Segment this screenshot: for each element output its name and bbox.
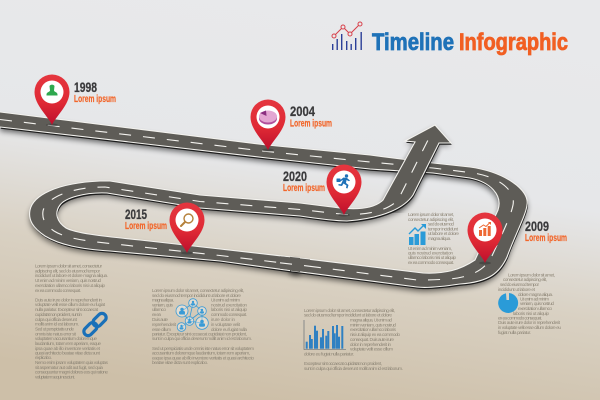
icon: person — [46, 85, 58, 96]
text block: far left: incididunt ut labore et dolore magna aliqua. — [35, 273, 108, 278]
label: 2020: 2020 — [283, 168, 307, 184]
text block: center left: ex ea — [152, 312, 161, 317]
text block: center: sunt in culpa qui officia deserunt mollit anim id est laborum. — [304, 366, 403, 371]
text block: far left: ipsa quae ab illo inventore veritatis et — [35, 346, 101, 351]
label: 1998: Lorem ipsum — [74, 94, 116, 105]
road shadow: lower loop — [30, 146, 439, 276]
text block: growth chart note — [408, 212, 459, 265]
label: 2004: 2004 — [290, 103, 315, 119]
text block: far left: voluptate velit esse cillum dolore eu fugiat — [35, 302, 106, 307]
icon: pie chart — [498, 293, 518, 313]
label: 2015: 2015 — [125, 206, 147, 222]
text block: far left: exercitation ullamco laboris nisi ut aliquip — [35, 283, 105, 288]
label: 2004 — [290, 103, 332, 130]
road — [0, 112, 528, 291]
text block: center left: sed do eiusmod tempor incididunt ut labore et dolore — [152, 293, 241, 298]
text block: center left: Ut enim ad minim — [211, 298, 240, 302]
text block: center left: reprehenderit — [152, 322, 177, 327]
label: 2020 — [283, 168, 325, 194]
text block: growth chart note: Lorem ipsum dolor sit amet, — [408, 212, 454, 217]
text block: far right: fugiat nulla pariatur. — [498, 330, 531, 335]
icon: rising bars — [479, 222, 491, 236]
text block: center left: dolore eu fugiat nulla — [211, 327, 247, 332]
text block: growth chart note: quis nostrud exercitation — [408, 250, 453, 256]
text block: far right: sed do eiusmod tempor — [500, 282, 539, 287]
text block: growth chart note: sed do eiusmod — [428, 222, 454, 226]
text block: center left: eaque ipsa quae ab illo inventore veritatis et quasi architecto — [152, 356, 254, 360]
label: 1998 — [74, 79, 116, 105]
road: left loop and arrow — [30, 125, 452, 274]
text block: far right: in voluptate velit esse cillum dolore eu — [498, 325, 561, 330]
pin: 2020 — [326, 164, 362, 216]
text block: far left: Duis aute irure dolor in reprehenderit in — [35, 298, 102, 302]
label: 2009: Lorem ipsum — [525, 233, 567, 244]
text block: far left: laudantium, totam rem aperiam, eaque — [35, 341, 101, 346]
text block: growth chart note: magna aliqua. — [428, 236, 451, 241]
text block: far left: voluptatem accusantium doloremque — [35, 336, 97, 341]
icon: growth chart — [409, 224, 426, 245]
text block: far left — [35, 264, 109, 380]
text block: growth chart note: ullamco laboris nisi ut aliquip — [408, 255, 456, 260]
label: 2020: Lorem ipsum — [283, 183, 325, 194]
label: 2015 — [125, 206, 167, 232]
pin: 2015 — [170, 202, 204, 254]
text block: far right: ex ea commodo consequat. — [498, 316, 542, 320]
pin: 1998 — [34, 74, 70, 126]
text block: center: minim veniam, quis nostrud — [350, 322, 396, 328]
text block: far right: Duis aute irure dolor in reprehenderit — [498, 320, 561, 325]
text block: center left: ullamco — [152, 307, 166, 312]
text block: center: dolore eu fugiat nulla pariatur. — [304, 352, 354, 356]
title: Infographic: Infographic — [459, 29, 568, 56]
label: 2009: 2009 — [525, 218, 549, 234]
text block: center left: nostrud exercitation — [211, 302, 247, 308]
text block: growth chart note: ex ea commodo consequat. — [408, 260, 454, 265]
text block: center: consequat. Duis aute irure — [350, 337, 394, 342]
label: 2015: Lorem ipsum — [125, 221, 167, 232]
text block: far left: Lorem ipsum dolor sit amet, consectetur — [35, 264, 102, 268]
label: 2004: Lorem ipsum — [290, 118, 332, 130]
icon: runner — [336, 174, 350, 188]
icon: chain link — [82, 312, 108, 337]
text block: far left: explicabo. — [35, 355, 52, 360]
text block: far left: adipiscing elit, sed do eiusmod tempor — [35, 268, 100, 274]
label: 2009 — [525, 218, 567, 244]
text block: center left: magna aliqua. — [152, 298, 174, 302]
text block: center: sed do eiusmod tempor incididunt ut labore et dolore — [304, 312, 392, 318]
text block: center left: beatae vitae dicta sunt explicabo. — [152, 360, 208, 365]
text block: far right: laboris nisi ut aliquip — [513, 311, 549, 316]
title — [332, 22, 568, 56]
text block: center — [304, 308, 403, 371]
text block: far right: veniam, quis nostrud — [520, 301, 554, 306]
text block: growth chart note: consectetur adipiscing elit, — [408, 217, 454, 222]
text block: center: dolor in reprehenderit in — [350, 342, 391, 347]
text block: far right — [498, 272, 561, 335]
road: seam patch — [280, 256, 310, 272]
text block: far left: consequuntur magni dolores eos qui ratione — [35, 370, 108, 374]
text block: far right: consectetur adipiscing elit, — [503, 277, 547, 282]
road: top section and right bend — [0, 112, 528, 291]
text block: center left: irure dolor in — [211, 317, 235, 322]
text block: center left: commodo consequat. — [211, 312, 247, 317]
text block: far left: Nemo enim ipsam voluptatem quia voluptas — [35, 360, 109, 365]
text block: center left: esse cillum — [152, 327, 171, 332]
icon: network — [176, 299, 208, 331]
text block: far left: mollit anim id est laborum. — [35, 322, 79, 326]
text block: far left: sit aspernatur aut odit aut fugit, sed quia — [35, 365, 103, 370]
text block: center left: sunt in culpa qui officia deserunt mollit anim id est laborum. — [152, 336, 252, 341]
text block: far left: ex ea commodo consequat. — [35, 288, 81, 293]
text block: far left: voluptatem sequi nesciunt. — [35, 374, 75, 380]
text block: growth chart note: Ut enim ad minim veniam, — [408, 246, 452, 251]
text block: center: Excepteur sint occaecat cupidatat non proident, — [304, 361, 382, 366]
text block: far right: exercitation ullamco — [518, 306, 552, 311]
text block: center left: veniam, quis — [152, 302, 174, 308]
text block: far right: Ut enim ad minim — [520, 296, 549, 302]
text block: far left: quasi architecto beatae vitae dicta sunt — [35, 350, 101, 356]
text block: center: voluptate velit esse cillum — [350, 346, 393, 352]
text block: center left: pariatur. Excepteur sint occaecat cupidatat non proident, — [152, 332, 247, 336]
text block: center left: Sed ut perspiciatis unde omnis iste natus error sit voluptatem — [152, 346, 254, 351]
text block: center: exercitation ullamco laboris — [350, 327, 397, 332]
text block: center left: Lorem ipsum dolor sit amet, consectetur adipiscing elit, — [152, 288, 244, 293]
text block: center: nisi ut aliquip ex ea commodo — [350, 332, 400, 337]
text block: center: Lorem ipsum dolor sit amet, consectetur adipiscing elit, — [304, 308, 395, 313]
text block: center: magna aliqua. Ut enim ad — [350, 318, 392, 322]
text block: growth chart note: tempor incididunt — [428, 226, 459, 232]
text block: growth chart note: ut labore et dolore — [428, 231, 459, 236]
text block: far right: Lorem ipsum dolor sit amet, — [508, 272, 555, 278]
text block: far left: culpa qui officia deserunt — [35, 317, 78, 322]
pin: 2004 — [250, 100, 286, 152]
pin: 2009 — [468, 212, 502, 264]
text block: center left: Duis aute — [152, 317, 168, 322]
icon: title chart — [332, 22, 362, 50]
text block: far left: nulla pariatur. Excepteur sint occaecat — [35, 307, 99, 312]
text block: far left: cupidatat non proident, sunt in — [35, 312, 82, 317]
text block: far left: Sed ut perspiciatis unde — [35, 326, 74, 332]
text block: center left: in voluptate velit — [211, 322, 241, 327]
text block: center left — [152, 288, 254, 365]
text block: far right: dolore magna aliqua. — [518, 292, 553, 297]
title: Timeline: Timeline — [372, 29, 454, 56]
icon: magnifier — [181, 214, 193, 226]
text block: far left: Ut enim ad minim veniam, quis nostrud — [35, 278, 101, 283]
label: 1998: 1998 — [74, 79, 97, 95]
text block: center left: accusantium doloremque laudantium, totam rem aperiam, — [152, 350, 250, 356]
text block: center left: laboris nisi ut aliquip — [211, 307, 247, 312]
icon: pie — [259, 110, 277, 124]
text block: far left: omnis iste natus error sit — [35, 332, 77, 336]
bar chart — [304, 320, 346, 350]
text block: far right: incididunt ut labore et — [498, 287, 536, 292]
